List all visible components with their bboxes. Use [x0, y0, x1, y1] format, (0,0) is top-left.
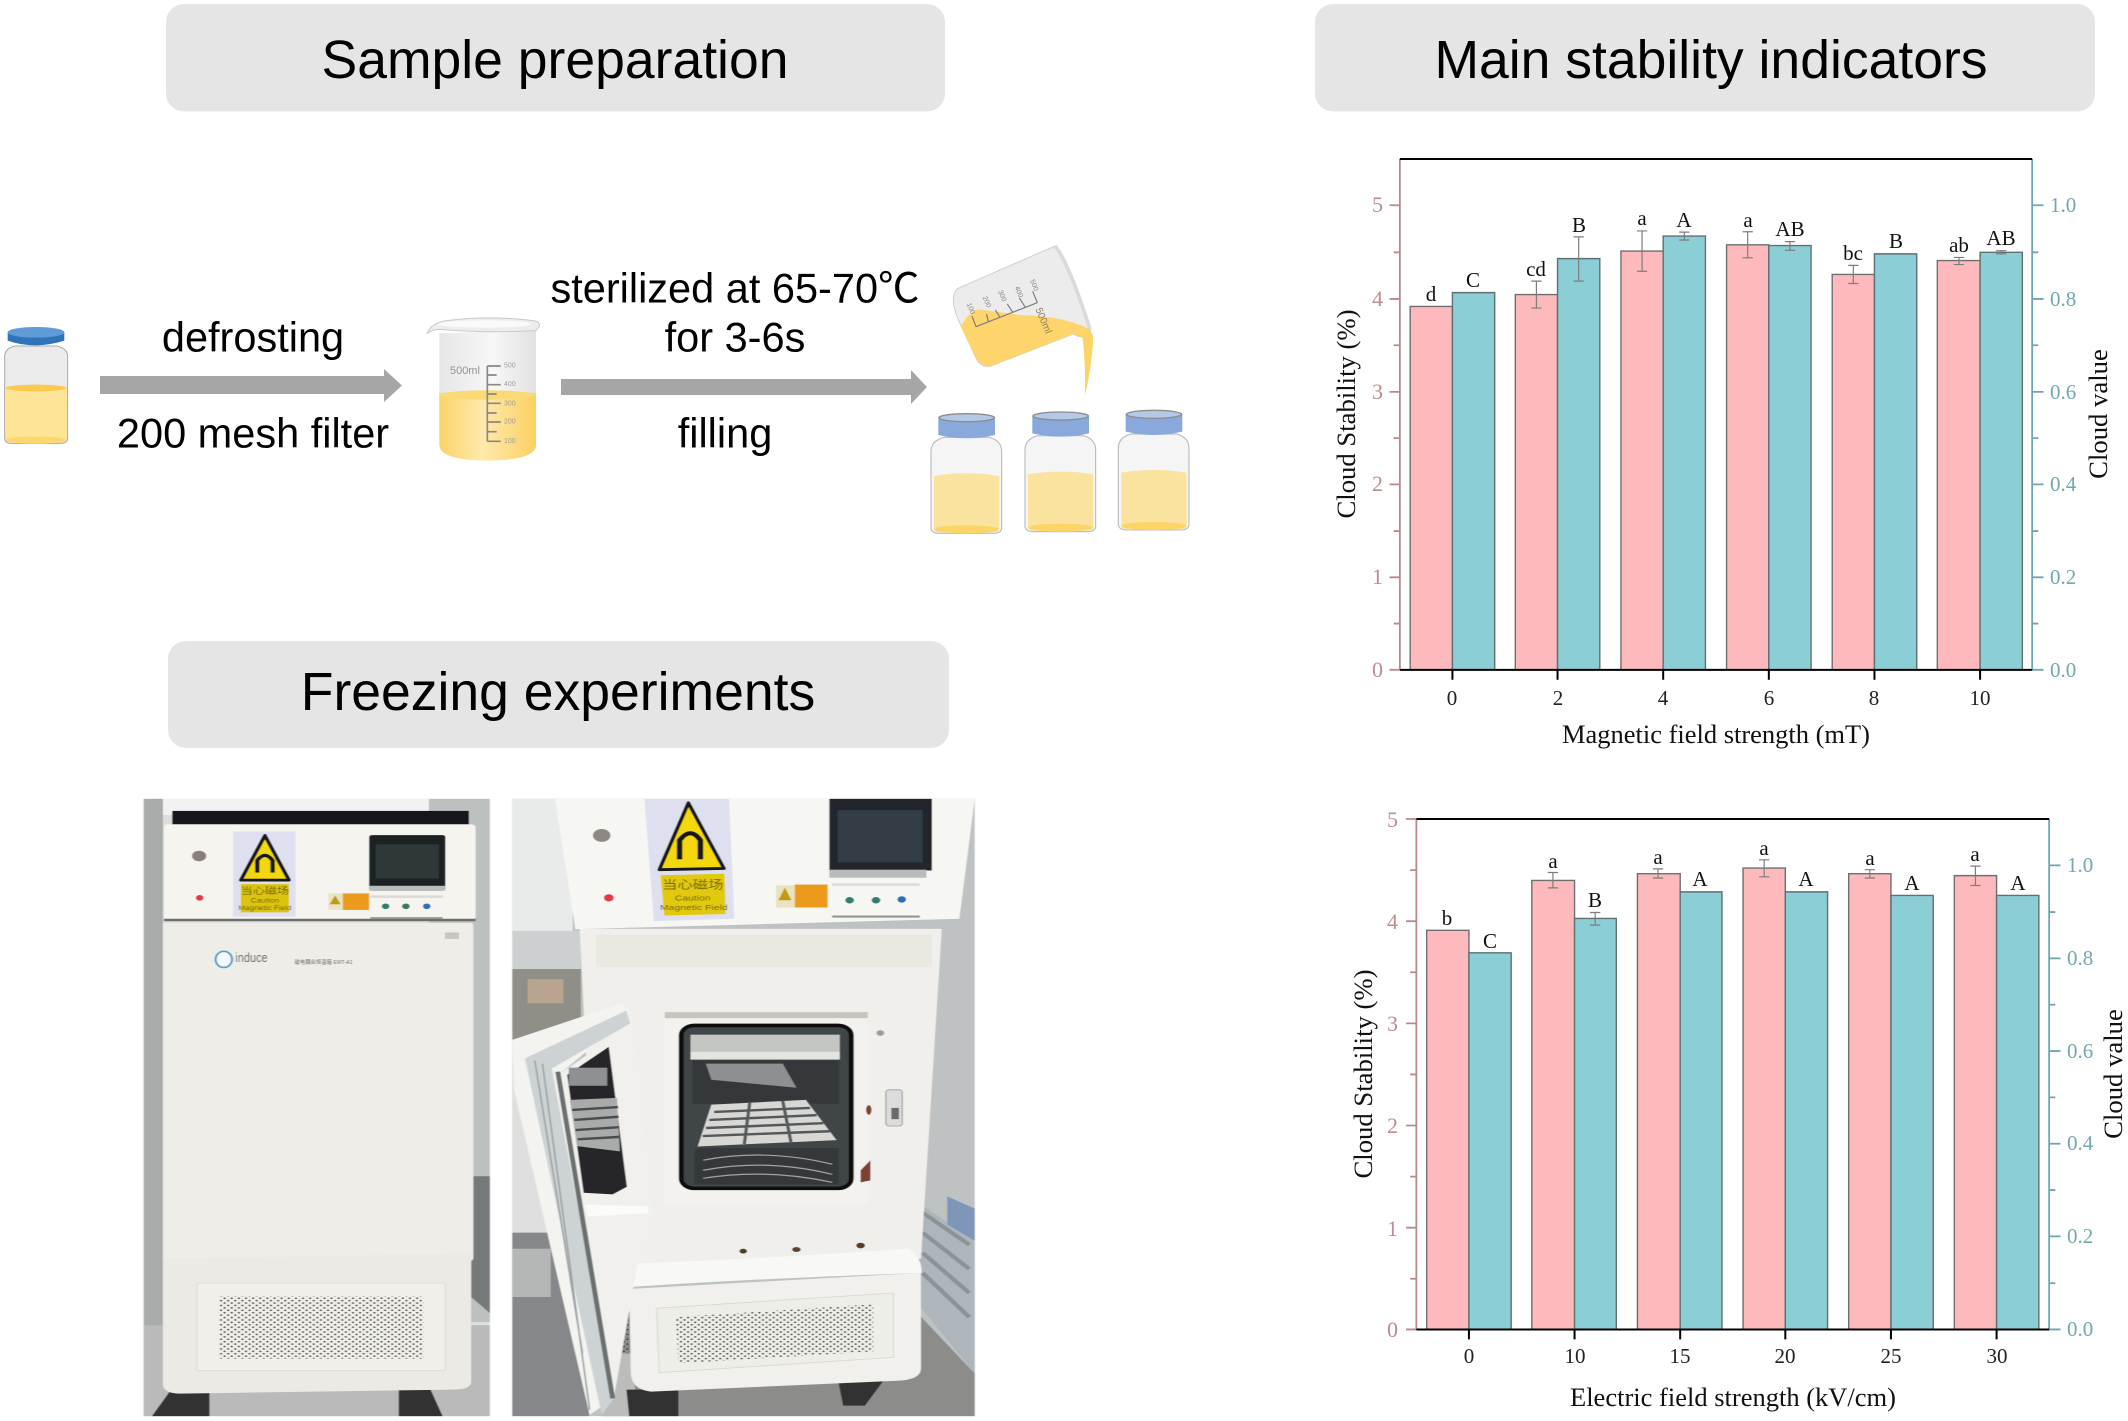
control panel: Magnetic Field: [660, 903, 728, 912]
significance letters: d: [1426, 282, 1437, 306]
icon: pouring beaker: 500: [1028, 279, 1039, 292]
significance letters: a: [1637, 206, 1647, 230]
right axis labels: 0.8: [2050, 287, 2076, 311]
left axis labels: [1372, 192, 1383, 682]
control panel: 当心磁场: [241, 885, 289, 896]
left axis labels: 1: [1372, 564, 1383, 589]
right axis labels: 0.6: [2050, 380, 2076, 404]
heading: Main stability indicators: Main stability indicators: [1434, 31, 1988, 90]
x axis labels: 4: [1658, 686, 1669, 710]
right axis labels: [2067, 853, 2094, 1341]
significance letters: [1442, 836, 2026, 953]
significance letters: a: [1970, 842, 1980, 866]
left axis labels: 3: [1372, 379, 1383, 404]
icon: beaker with juice: 500: [504, 362, 516, 369]
significance letters: a: [1653, 845, 1663, 869]
left axis labels: 4: [1387, 909, 1398, 934]
x axis labels: [1447, 686, 1990, 710]
label: 200 mesh filter: 200 mesh filter: [117, 410, 389, 456]
significance letters: A: [2010, 871, 2026, 895]
right axis labels: 0.4: [2050, 472, 2077, 496]
icon: pouring beaker: [953, 246, 1093, 395]
x axis labels: 6: [1764, 686, 1774, 710]
icon: frozen juice vial: [5, 327, 68, 444]
left axis labels: 3: [1387, 1011, 1398, 1036]
icon: pouring beaker: 300: [996, 289, 1007, 303]
icon: beaker with juice: 100: [504, 438, 516, 445]
icon: pouring beaker: 500ml: [1033, 306, 1053, 336]
control panel: Magnetic Field: [238, 904, 292, 912]
significance letters: a: [1865, 846, 1875, 870]
significance letters: AB: [1775, 217, 1805, 241]
left axis labels: 1: [1387, 1216, 1398, 1241]
significance letters: B: [1889, 229, 1903, 253]
chart: cloud stability and cloud value vs electric field strength: [1348, 807, 2128, 1412]
significance letters: a: [1548, 849, 1558, 873]
bars: [1427, 860, 2039, 1329]
control panel: [164, 824, 476, 921]
heading: Freezing experiments: Freezing experiments: [301, 663, 815, 722]
door panel with brand: induce: [235, 951, 268, 966]
right axis labels: 0.8: [2067, 946, 2093, 970]
icon: three filled bottles: [931, 410, 1189, 533]
x axis labels: 10: [1564, 1344, 1586, 1368]
significance letters: a: [1759, 836, 1769, 860]
left axis labels: 2: [1387, 1113, 1398, 1138]
icon: beaker with juice: 300: [504, 400, 516, 407]
chart: cloud stability and cloud value vs magnetic field strength: [1331, 159, 2113, 749]
arrow: sterilization and filling step: [561, 370, 927, 404]
open door: [512, 1003, 654, 1415]
right axis labels: 0.2: [2050, 565, 2076, 589]
right axis labels: 0.0: [2050, 658, 2076, 682]
x axis title: magnetic field: Magnetic field strength (mT): [1562, 719, 1870, 749]
left axis labels: [1387, 807, 1398, 1342]
significance letters: bc: [1843, 241, 1863, 265]
significance letters: ab: [1949, 233, 1969, 257]
left axis labels: 2: [1372, 471, 1383, 496]
heading: Freezing experiments: [168, 641, 949, 748]
base with vent: [163, 1253, 471, 1394]
significance letters: [1426, 206, 2016, 306]
significance letters: a: [1743, 208, 1753, 232]
significance letters: A: [1904, 871, 1920, 895]
left axis labels: 0: [1372, 657, 1383, 682]
axes: [1406, 819, 2060, 1339]
significance letters: A: [1676, 208, 1692, 232]
significance letters: C: [1466, 268, 1480, 292]
heading: Sample preparation: Sample preparation: [322, 31, 788, 90]
icon: beaker with juice: [427, 318, 540, 461]
left axis labels: 5: [1387, 807, 1398, 832]
icon: beaker with juice: 500ml: [450, 365, 480, 377]
label: defrosting: defrosting: [162, 314, 344, 360]
control panel: Caution: [675, 894, 711, 902]
label: sterilized at 65-70℃: sterilized at 65-70℃: [550, 264, 920, 312]
x axis labels: 25: [1880, 1344, 1902, 1368]
right axis labels: 0.4: [2067, 1131, 2094, 1155]
icon: beaker with juice: 400: [504, 381, 516, 388]
significance letters: cd: [1526, 257, 1546, 281]
y axis title: cloud value: Cloud value: [2098, 1009, 2128, 1139]
significance letters: C: [1483, 929, 1497, 953]
right axis labels: 0.2: [2067, 1224, 2093, 1248]
machine body: [580, 929, 942, 1269]
left axis labels: 0: [1387, 1317, 1398, 1342]
right axis labels: 1.0: [2050, 193, 2076, 217]
significance letters: B: [1588, 888, 1602, 912]
x axis labels: 30: [1986, 1344, 2008, 1368]
significance letters: AB: [1986, 226, 2016, 250]
x axis labels: [1464, 1344, 2008, 1368]
icon: pouring beaker: 400: [1013, 285, 1024, 299]
x axis labels: 15: [1670, 1344, 1690, 1368]
right axis labels: 0.6: [2067, 1039, 2093, 1063]
icon: pouring beaker: 100: [965, 302, 976, 316]
x axis labels: 0: [1447, 686, 1457, 710]
significance letters: B: [1572, 213, 1586, 237]
base with vent: [595, 1249, 922, 1392]
door panel with brand: 磁电耦合恒温箱 EMT-A1: [295, 958, 353, 966]
significance letters: A: [1798, 867, 1814, 891]
right axis labels: 0.0: [2067, 1317, 2093, 1341]
icon: beaker with juice: 200: [504, 419, 516, 426]
heading: Main stability indicators: [1315, 4, 2095, 112]
x axis title: electric field: Electric field strength (kV/cm): [1570, 1382, 1896, 1412]
x axis labels: 8: [1869, 686, 1879, 710]
bars: [1410, 231, 2022, 670]
left axis labels: 4: [1372, 286, 1383, 311]
right axis labels: [2050, 193, 2077, 682]
heading: Sample preparation: [166, 4, 945, 112]
control panel: 当心磁场: [662, 879, 723, 891]
x axis labels: 10: [1970, 686, 1990, 710]
y axis title: cloud stability: Cloud Stability (%): [1331, 309, 1361, 519]
right axis labels: 1.0: [2067, 853, 2093, 877]
label: for 3-6s: for 3-6s: [665, 314, 805, 360]
significance letters: A: [1692, 867, 1708, 891]
arrow: defrosting step: [100, 369, 402, 402]
photo: open freezing chamber: [512, 799, 975, 1416]
y axis title: cloud stability: Cloud Stability (%): [1348, 969, 1378, 1179]
label: filling: filling: [678, 410, 772, 456]
left axis labels: 5: [1372, 192, 1383, 217]
icon: pouring beaker: 200: [981, 295, 992, 309]
y axis title: cloud value: Cloud value: [2083, 349, 2113, 479]
x axis labels: 20: [1774, 1344, 1796, 1368]
chamber window and shelves: [665, 1012, 902, 1254]
x axis labels: 2: [1553, 686, 1563, 710]
control panel: [555, 799, 975, 929]
door panel with brand: [163, 923, 473, 1261]
x axis labels: 0: [1464, 1344, 1474, 1368]
panel: sample preparation flow: [5, 246, 1189, 533]
significance letters: b: [1442, 906, 1452, 930]
control panel: Caution: [251, 897, 279, 904]
axes: [1390, 159, 2043, 680]
photo: closed freezing chamber: [144, 799, 490, 1416]
